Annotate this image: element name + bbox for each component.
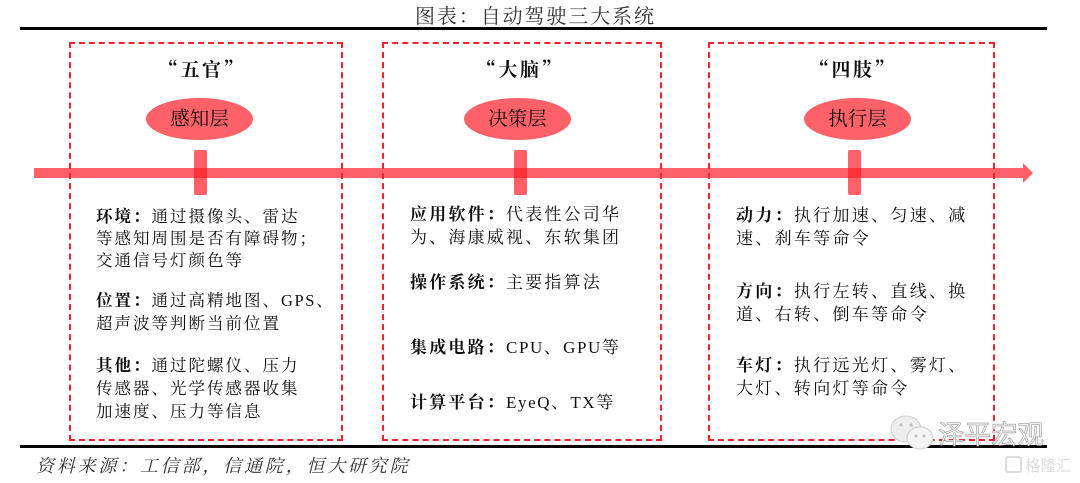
heading: “四肢” (810, 55, 896, 82)
application software text (410, 205, 621, 247)
position text (96, 291, 335, 333)
other text: 加速度、压力等信息 (96, 402, 262, 421)
panel: execution layer (708, 42, 995, 441)
lights text: 大灯、转向灯等命令 (736, 379, 910, 398)
power text (736, 206, 968, 248)
heading: “五官” (159, 55, 245, 82)
power text: 动力：执行加速、匀速、减 (736, 206, 968, 225)
layer ellipse: 感知层 (170, 109, 229, 130)
direction text: 道、右转、倒车等命令 (736, 305, 929, 324)
title: 图表：自动驾驶三大系统 (415, 0, 656, 29)
watermark: account name: 泽平宏观 (938, 420, 1044, 450)
bottom rule (20, 445, 1047, 448)
application software text: 应用软件：代表性公司华 (410, 205, 621, 224)
watermark: platform logo: 格隆汇 (1025, 458, 1072, 475)
heading: “大脑” (477, 55, 563, 82)
panel border (708, 42, 995, 441)
panel border (69, 42, 343, 441)
watermark: wechat icon (890, 416, 934, 450)
other text (96, 356, 300, 421)
panel: perception layer (69, 42, 343, 441)
environment text (96, 207, 318, 270)
top rule (20, 27, 1047, 30)
operating system text: 操作系统：主要指算法 (410, 273, 602, 292)
timeline arrow (34, 163, 1033, 183)
panel border (382, 42, 662, 441)
timeline tick (194, 150, 207, 195)
layer ellipse (464, 98, 571, 140)
computing platform text: 计算平台：EyeQ、TX等 (410, 393, 615, 412)
watermark: platform logo (1005, 456, 1072, 475)
timeline tick (514, 150, 527, 195)
position text: 超声波等判断当前位置 (96, 314, 281, 333)
layer ellipse (804, 98, 911, 140)
lights text: 车灯：执行远光灯、雾灯、 (736, 356, 968, 375)
timeline tick (848, 150, 861, 195)
layer ellipse: 决策层 (488, 109, 547, 130)
direction text: 方向：执行左转、直线、换 (736, 282, 968, 301)
panel: decision layer (382, 42, 662, 441)
layer ellipse (146, 98, 253, 140)
source note: 资料来源：工信部，信通院，恒大研究院 (36, 452, 410, 478)
position text: 位置：通过高精地图、GPS、 (96, 291, 335, 310)
environment text: 等感知周围是否有障碍物； (96, 229, 318, 248)
application software text: 为、海康威视、东软集团 (410, 228, 621, 247)
environment text: 环境：通过摄像头、雷达 (96, 207, 300, 226)
other text: 其他：通过陀螺仪、压力 (96, 356, 300, 375)
environment text: 交通信号灯颜色等 (96, 251, 244, 270)
layer ellipse: 执行层 (828, 109, 887, 130)
direction text (736, 282, 968, 324)
other text: 传感器、光学传感器收集 (96, 379, 300, 398)
integrated circuit text: 集成电路：CPU、GPU等 (410, 338, 621, 357)
power text: 速、刹车等命令 (736, 229, 871, 248)
lights text (736, 356, 968, 398)
